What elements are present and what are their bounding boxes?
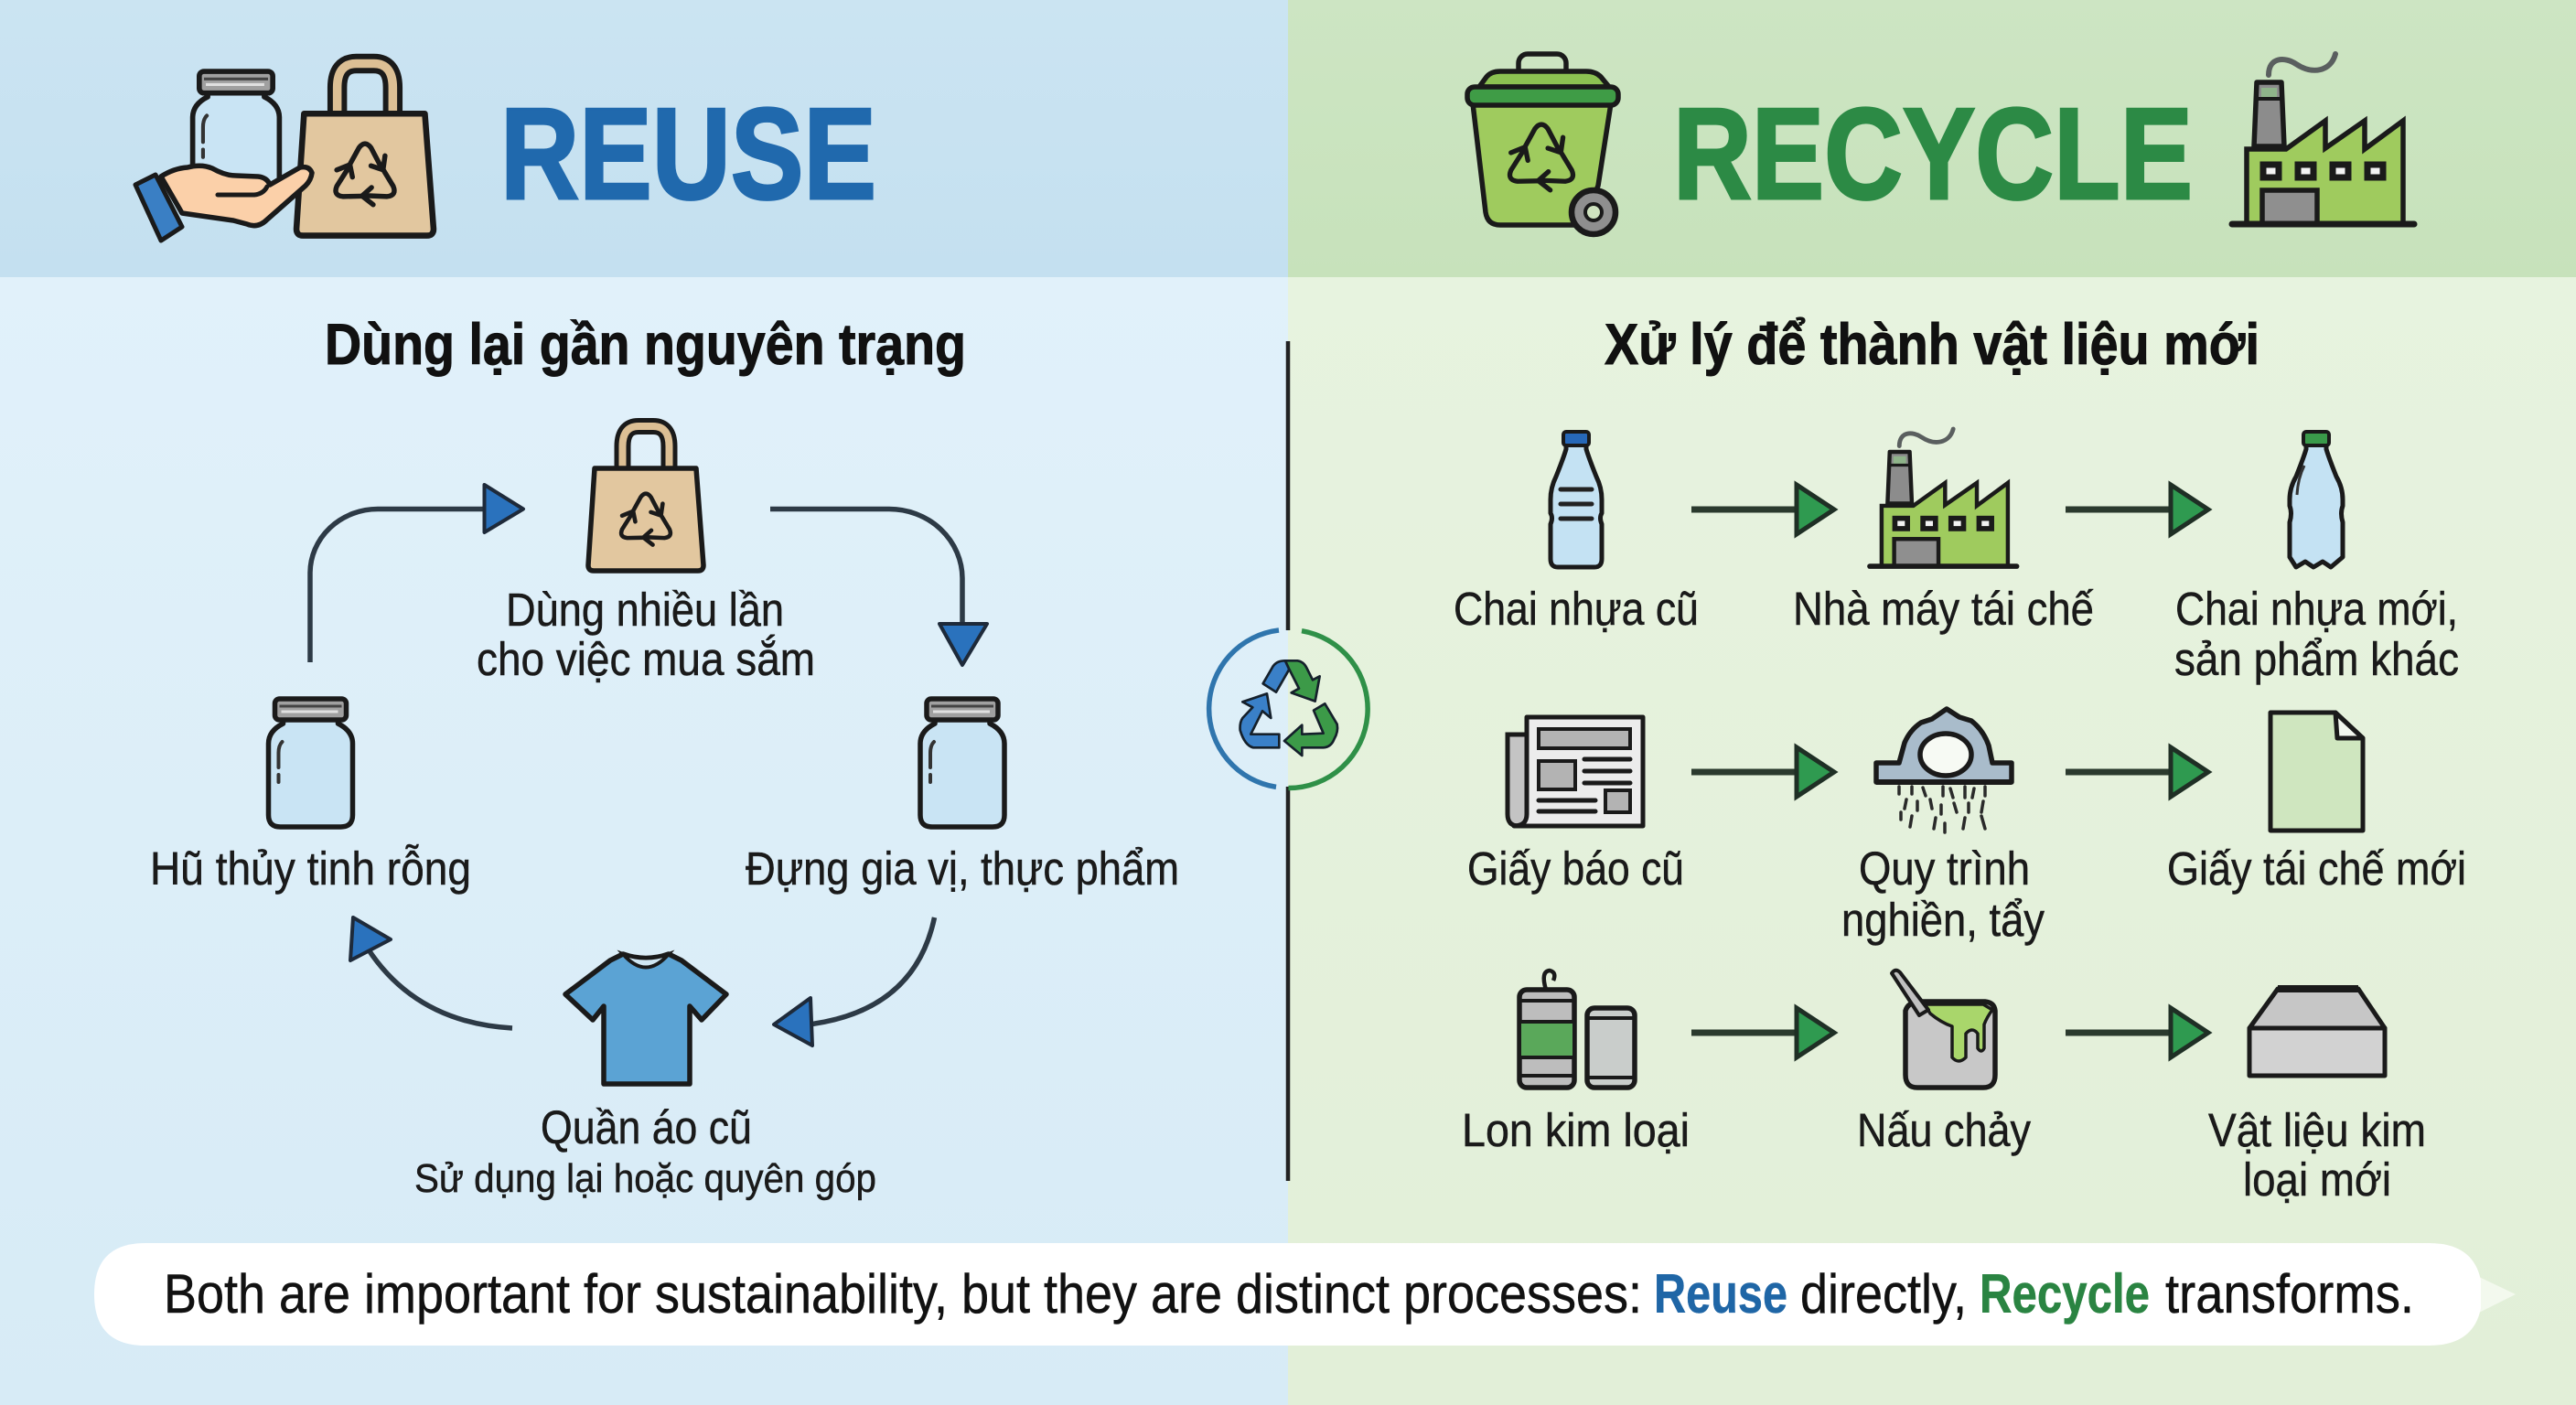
icon: recycling factory	[1870, 429, 2017, 566]
label: new metal material: Vật liệu kim	[2208, 1104, 2426, 1156]
arrow: row 2 a	[1691, 747, 1834, 797]
label: new metal material: loại mới	[2243, 1153, 2391, 1206]
icon: shopping bag	[588, 426, 703, 571]
callout: bottom summary	[94, 1243, 2516, 1346]
label: grinding process	[1841, 842, 2045, 946]
icon: jar, bag and hand	[135, 64, 434, 241]
arrow: bag to food jar	[770, 509, 987, 665]
label: new bottle: sản phẩm khác	[2174, 633, 2459, 685]
title: REUSE: REUSE	[500, 81, 876, 227]
arrow: row 3 a	[1691, 1008, 1834, 1057]
label: new metal material	[2208, 1104, 2426, 1206]
icon: empty jar	[269, 699, 353, 827]
arrow: row 2 b	[2066, 747, 2208, 797]
heading: reuse subtitle: Dùng lại gần nguyên trạng	[325, 313, 966, 377]
icon: melting pot	[1892, 971, 1995, 1088]
label: old clothes: Sử dụng lại hoặc quyên góp	[414, 1156, 876, 1201]
callout: bottom summary: Reuse	[1654, 1263, 1787, 1325]
icon: old bottle	[1551, 432, 1602, 567]
icon: recycling bin	[1467, 54, 1618, 234]
background: recycle header band	[1288, 0, 2576, 277]
background: recycle body	[1288, 277, 2576, 1405]
callout: bottom summary: directly,	[1800, 1263, 1967, 1325]
icon: recycled paper sheet	[2270, 713, 2363, 831]
title: RECYCLE: RECYCLE	[1673, 81, 2193, 227]
label: old clothes	[414, 1101, 876, 1201]
label: melting: Nấu chảy	[1857, 1104, 2031, 1156]
divider with center recycle badge	[1209, 341, 1368, 1181]
icon: t-shirt	[565, 954, 726, 1084]
icon: metal cans	[1519, 971, 1635, 1088]
heading: recycle subtitle: Xử lý để thành vật liệu mới	[1605, 313, 2259, 377]
icon: factory header	[2232, 54, 2414, 224]
arrow: jar to bag	[310, 485, 523, 662]
label: old bottle: Chai nhựa cũ	[1454, 583, 1699, 635]
arrow: clothes to empty jar	[350, 917, 512, 1028]
label: food jar: Đựng gia vị, thực phẩm	[746, 842, 1179, 895]
panel: reuse cycle	[150, 426, 1179, 1201]
label: old newspaper: Giấy báo cũ	[1467, 842, 1684, 895]
label: grinding process: Quy trình	[1859, 842, 2030, 895]
label: bag	[477, 584, 815, 685]
arrow: food jar to clothes	[774, 917, 935, 1046]
icon: new bottle	[2290, 432, 2343, 567]
background: reuse header band	[0, 0, 1288, 277]
label: metal cans: Lon kim loại	[1462, 1104, 1690, 1156]
callout: bottom summary: Recycle	[1980, 1263, 2150, 1325]
background: reuse body	[0, 277, 1288, 1405]
callout: bottom summary: Both are important for sustainability, but they are distinct processes:	[164, 1263, 1642, 1325]
label: grinding process: nghiền, tẩy	[1841, 894, 2045, 946]
icon: metal ingot	[2249, 989, 2385, 1076]
icon: grinder	[1876, 709, 2012, 832]
callout: bottom summary: transforms.	[2165, 1263, 2414, 1325]
panel: recycle flows	[1454, 429, 2466, 1206]
label: new paper: Giấy tái chế mới	[2167, 842, 2466, 895]
label: old clothes: Quần áo cũ	[541, 1101, 752, 1153]
label: new bottle: Chai nhựa mới,	[2175, 583, 2458, 635]
arrow: row 1 a	[1691, 485, 1834, 534]
label: bag: Dùng nhiều lần	[506, 584, 784, 636]
label: empty jar: Hũ thủy tinh rỗng	[150, 842, 471, 895]
icon: food jar	[920, 699, 1004, 827]
label: factory: Nhà máy tái chế	[1793, 583, 2094, 635]
label: bag: cho việc mua sắm	[477, 633, 815, 685]
arrow: row 3 b	[2066, 1008, 2208, 1057]
label: new bottle	[2174, 583, 2459, 685]
icon: newspaper	[1508, 717, 1643, 826]
arrow: row 1 b	[2066, 485, 2208, 534]
